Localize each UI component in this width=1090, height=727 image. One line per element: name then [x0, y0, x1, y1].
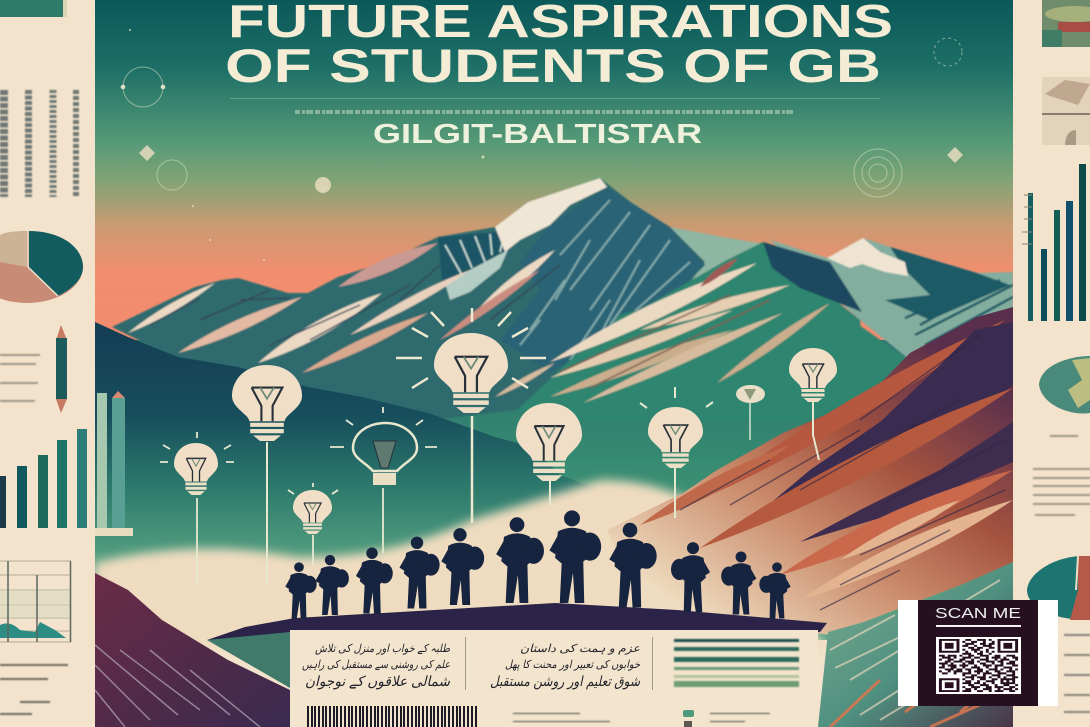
silhouettes of students: [285, 510, 791, 618]
subtitle rule and illegible tagline: [230, 98, 880, 112]
dark purple face lower: [800, 422, 1013, 542]
label rule: [936, 625, 1021, 627]
bulb 2: [160, 432, 234, 583]
valley patch behind centre mountain: [520, 270, 912, 420]
main range mass: [112, 178, 705, 420]
lower right fragments: [1064, 635, 1090, 712]
student 3: [356, 548, 393, 614]
rust band lower: [780, 470, 1013, 575]
bulb 4 outlined: [330, 407, 437, 553]
right sidebar background: [1013, 0, 1090, 727]
right bar chart: [1022, 164, 1086, 321]
low mist: [95, 480, 830, 650]
column 1 script text: [302, 643, 450, 690]
pie chart heading: [8, 223, 58, 225]
sky decorations: [121, 29, 963, 261]
left bar chart labels: [17, 532, 90, 534]
bulb 7: [640, 387, 713, 518]
column 1 script text: علم کی روشنی سے مستقبل کی راہیں: [302, 659, 450, 671]
icon: spiral circle: [854, 149, 902, 197]
poster scene: sky: [95, 0, 1013, 345]
scan me label: SCAN ME: [935, 606, 1021, 622]
left sidebar charts: [0, 0, 90, 714]
pie heading: [1057, 544, 1090, 546]
far right dark faces: [885, 247, 1010, 320]
title: OF STUDENTS OF GB: [225, 39, 881, 92]
right pie chart: [1027, 556, 1090, 620]
title: [225, 0, 893, 92]
summit light ribs: [445, 232, 505, 275]
slope streaks: [830, 580, 1000, 720]
heading line above columns: [0, 74, 78, 78]
column 2 script text: شوق تعلیم اور روشن مستقبل: [490, 673, 640, 690]
icon: lower left circle: [157, 160, 187, 190]
text block: [1033, 436, 1090, 515]
bulb 9: [789, 348, 837, 460]
map blob: [1039, 356, 1090, 413]
bulb 6: [516, 403, 582, 505]
bulb 8: [736, 385, 765, 440]
column 1 script text: شمالی علاقوں کے نوجوان: [305, 673, 450, 690]
lower right green slope: [818, 562, 1013, 727]
bottom information panel: [290, 630, 818, 727]
far right snow: [827, 238, 908, 276]
rust edge band: [700, 320, 1005, 500]
dark purple face upper: [760, 322, 1013, 512]
bulb 1: [232, 365, 302, 583]
background mountains: [112, 178, 1013, 420]
bulb 5: [396, 308, 546, 523]
student 9: [671, 542, 710, 612]
student 4: [399, 537, 440, 608]
footer icons: [683, 710, 694, 727]
icon: diamond stars: [129, 29, 963, 261]
far right streaks: [905, 280, 1013, 350]
student 6: [496, 517, 544, 603]
subtitle: Gilgit-Baltistan: GILGIT-BALTISTAR: [373, 118, 702, 149]
left range tapered bands: [128, 243, 560, 397]
striped mini chart: [674, 639, 799, 687]
green shadow under the ridge: [207, 628, 290, 688]
card dark panel: [918, 600, 1038, 706]
student 8: [609, 523, 657, 608]
small dark summit: [438, 230, 518, 283]
lower text lines: [0, 665, 68, 714]
main peak light streaks: [520, 200, 690, 360]
lower left plum mountain: [95, 573, 290, 727]
pale haze ridge: [607, 187, 770, 310]
student 2: [315, 555, 349, 615]
top image thumbnail: [1042, 0, 1090, 55]
student 11: [759, 562, 791, 618]
column 1 script text: طلبہ کے خواب اور منزل کی تلاش: [315, 643, 450, 655]
top image thumbnail: [0, 0, 70, 36]
left bar chart: [0, 429, 87, 528]
card white backing: [898, 600, 1058, 706]
rust edge band lower left: [640, 445, 790, 525]
ridge where the students stand: [207, 603, 827, 640]
thin streaks: [680, 335, 1005, 610]
barcode: [308, 706, 476, 727]
sketch thumbnail: [1042, 77, 1090, 145]
green valley: [95, 340, 1013, 640]
plum mountain streaks: [95, 645, 260, 727]
left dark hill: [95, 322, 640, 600]
right rust mountain: [607, 307, 1013, 635]
column 2 script text: [490, 643, 640, 690]
student 5: [441, 528, 484, 605]
column divider 1: [464, 637, 466, 690]
centre mountain dark ridge: [763, 242, 862, 312]
text lines beside pencil: [0, 355, 40, 401]
column divider 2: [652, 637, 654, 690]
right sidebar charts: [1022, 0, 1090, 712]
cream bands lower: [800, 500, 1013, 600]
column 2 script text: خوابوں کی تعبیر اور محنت کا پھل: [505, 659, 640, 671]
right bar chart label: [1035, 331, 1076, 333]
icon: dashed ring: [934, 38, 962, 66]
QR code: [936, 637, 1021, 694]
pale snow patch: [445, 250, 508, 300]
student 1: [285, 562, 317, 618]
centre mountain: [515, 242, 862, 412]
footer info lines: [513, 713, 770, 722]
rust band middle: [700, 388, 1013, 548]
panel background: [290, 630, 818, 727]
left poster overlap bars: [95, 391, 133, 536]
student 7: [549, 510, 601, 603]
QR code card: [898, 600, 1058, 706]
column 2 script text: عزم و ہمت کی داستان: [520, 643, 640, 655]
icon: left orbit circle: [121, 67, 165, 107]
student 10: [721, 551, 756, 614]
far right mountain: [770, 238, 1013, 360]
centre mountain bands: [550, 258, 830, 403]
left grid chart: [0, 561, 71, 642]
pie chart: [0, 231, 83, 303]
vertical text columns: [4, 90, 76, 197]
main peak dark face: [500, 187, 705, 372]
bulb 3: [288, 483, 338, 565]
lightbulbs: [160, 308, 837, 583]
main peak snow: [495, 178, 607, 252]
pencil icon: [56, 325, 67, 413]
